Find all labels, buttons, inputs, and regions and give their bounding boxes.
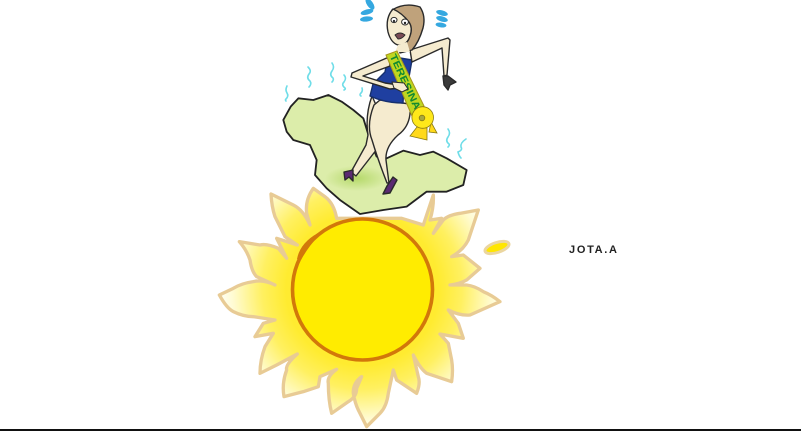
face — [387, 9, 411, 45]
bottom border — [0, 429, 801, 431]
woman character — [344, 5, 456, 194]
eyes — [391, 17, 408, 25]
blue swimsuit — [370, 56, 412, 103]
map of Piaui — [283, 95, 467, 214]
sash with text — [386, 51, 424, 116]
ribbons — [410, 127, 427, 140]
sash band — [386, 51, 424, 116]
sash text: TERESINA — [387, 53, 422, 112]
shoes — [344, 170, 353, 181]
rosette — [410, 107, 437, 140]
sweat drops — [360, 0, 448, 28]
hand over sash — [392, 82, 408, 92]
signature: JOTA.A — [569, 244, 617, 256]
disc thick edge — [297, 233, 320, 260]
hand right — [443, 76, 456, 90]
sun — [219, 188, 500, 427]
small flying yellow spark — [484, 239, 510, 256]
hair back — [392, 5, 424, 53]
pupils — [393, 20, 406, 24]
sun disc — [292, 219, 432, 360]
back leg — [351, 96, 385, 176]
mouth — [395, 33, 405, 39]
front leg — [369, 100, 410, 183]
sun rays — [219, 188, 500, 427]
map outline — [283, 95, 467, 214]
heat waves — [286, 63, 466, 158]
raised arm — [410, 38, 450, 76]
neck — [395, 42, 410, 52]
arm on hip — [351, 57, 400, 89]
rosette disc — [412, 107, 434, 128]
